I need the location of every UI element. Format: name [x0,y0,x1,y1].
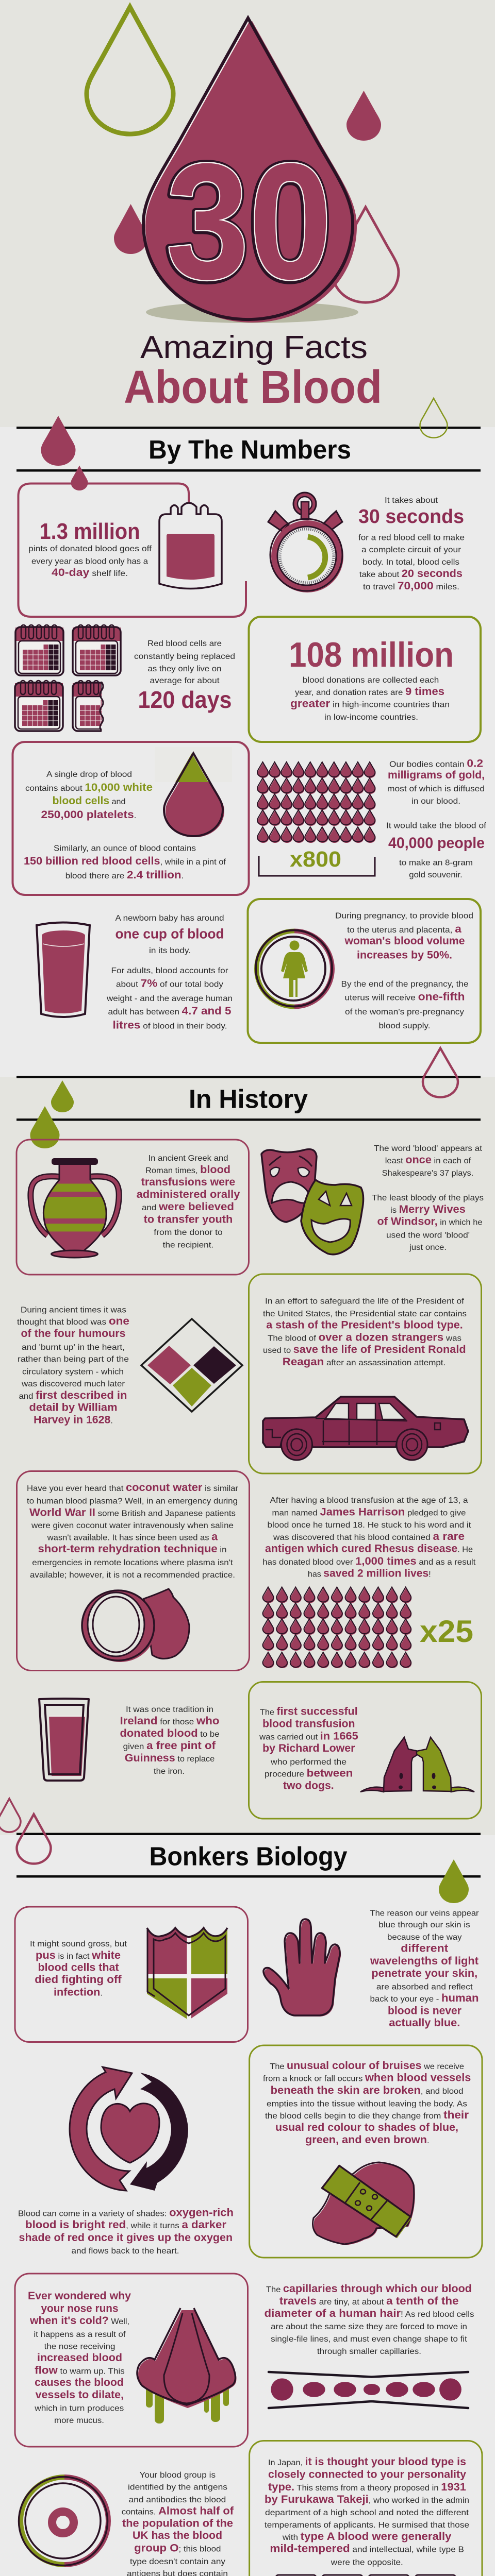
text block: Your blood group is [140,2471,216,2480]
text block: of Windsor, in which he [377,1216,483,1228]
text block: administered orally [137,1189,240,1200]
text block: because of the way [387,1933,462,1942]
text block: 250,000 platelets . [41,809,136,821]
text block: has saved 2 million lives! [308,1568,431,1580]
text block: average for about [150,676,220,685]
text block: to the uterus and placenta, a [347,923,461,935]
panel: bruises [250,2045,482,2258]
text block: blue through our skin is [378,1921,470,1929]
icon: car [263,1397,468,1460]
panel frame [249,1682,482,1819]
big number 30: 30 [166,129,332,313]
section heading: In History [16,1048,481,1148]
text block: For adults, blood accounts for [111,967,228,975]
text block: was discovered that his blood contained a rare [273,1531,465,1543]
fact: shades of blood [18,2067,234,2256]
text block: milligrams of gold, [388,769,485,781]
text block: flow to warm up. This [35,2364,125,2376]
icon: O in ring [19,2477,108,2566]
chart: capillary with cells [269,2372,468,2408]
drop shadow ellipse [146,301,358,323]
text block: type. This stems from a theory proposed in 1931 [268,2481,466,2493]
text block: about 7% of our total body [116,978,223,989]
icon: maroon outline drop [16,1814,51,1863]
title: About Blood [124,362,382,413]
text block: Similarly, an ounce of blood contains [54,844,196,853]
text block: take about 20 seconds [359,568,463,580]
icon: theatre masks [261,1149,364,1255]
text block: uterus will receive one-fifth [344,991,465,1003]
text block [17,1306,129,1426]
fact: capillaries [264,2283,474,2408]
panel frame [15,2274,248,2447]
text block: least once in each of [385,1154,471,1166]
text block: 1.3 million [39,519,140,544]
text block: After having a blood transfusion at the age of 13, a [270,1496,468,1505]
text block: a stash of the President's blood type. [266,1319,463,1331]
panel: ancient Greek and Roman [16,1140,249,1275]
text block: actually blue. [389,2017,460,2029]
text block: diameter of a human hair ! As red blood cells [264,2308,474,2319]
text block: Red blood cells are [147,639,222,648]
text block: wasn't available. It has since been used as a [47,1531,218,1543]
icon: green outline drop [420,398,448,438]
text block: the population of the [122,2517,233,2530]
text block: back to your eye - human [370,1992,478,2004]
text block: The reason our veins appear [370,1909,479,1918]
panel frame [15,1907,248,2042]
text block: are absorbed and reflect [376,1982,473,1991]
text block: gold souvenir. [409,871,463,879]
text block: greater in high-income countries than [290,698,450,710]
icon: two-colour drop [163,751,224,837]
text block: given a free pint of [123,1740,216,1752]
text block: A single drop of blood [46,770,132,779]
fact: blood in Shakespeare [261,1144,484,1255]
text block: 30 seconds [358,506,464,528]
text block: and antibodies the blood [129,2496,226,2504]
text block: year, and donation rates are 9 times [295,686,444,698]
text block: used the word 'blood' [386,1231,470,1240]
panel frame [248,899,481,1043]
text block: of the woman's pre-pregnancy [345,1008,464,1016]
panel frame [249,617,481,742]
text block: identified by the antigens [128,2483,227,2492]
multiplier x800 with bracket [259,847,375,876]
text block: In Japan, it is thought your blood type is [268,2456,466,2468]
panel: presidential car [249,1274,482,1473]
text block: blood cells and [53,795,126,807]
text block: It takes about [385,496,438,505]
text block: World War II some British and Japanese patients [29,1506,236,1518]
text block: pints of donated blood goes off [28,545,152,553]
text block: blood supply. [378,1022,430,1030]
text block: has donated blood over 1,000 times and as a result [262,1555,476,1567]
text block: man named James Harrison pledged to give [272,1506,466,1518]
text block: procedure between [265,1768,353,1780]
text block: pus is in fact white [36,1950,121,1961]
text block: Roman times, blood [145,1164,230,1176]
icon: maroon drop [41,416,75,466]
icon: calendars [15,625,121,731]
text block: UK has the blood [133,2530,222,2541]
text block: thought that blood was one [17,1315,129,1327]
text block: antigen which cured Rhesus disease . He [265,1543,473,1555]
text block: The capillaries through which our blood [266,2283,472,2295]
text block: Reagan after an assassination attempt. [283,1356,446,1368]
icon: glass of blood [37,922,90,1017]
text block: travels are tiny, at about a tenth of the [279,2295,459,2307]
icon: small maroon drop right [346,91,381,141]
text block [28,519,152,579]
text block: with type A blood were generally [282,2531,452,2543]
text block: In ancient Greek and [148,1154,228,1163]
text block: blood there are 2.4 trillion . [65,869,184,881]
panel: white cells and platelets [12,742,249,895]
text block: and flows back to the heart. [71,2247,179,2256]
panel frame [16,1140,249,1275]
text block: through smaller capillaries. [317,2347,421,2356]
text block: the blood cells begin to die they change from their [265,2109,469,2121]
icon: two dogs [360,1737,474,1792]
text block [335,912,473,1030]
text block: increased blood [37,2352,122,2364]
text block: usual red colour to shades of blue, [275,2122,458,2133]
text block: was carried out in 1665 [259,1731,358,1742]
text block: 108 million [289,635,454,674]
text block: were given coconut water intravenously when saline [31,1521,234,1530]
text block: and 'burnt up' in the heart, [22,1343,125,1352]
fact: cup of blood [37,914,233,1031]
text block [27,1482,239,1580]
fact: pint of Guinness [39,1699,220,1781]
heading text: In History [189,1084,308,1113]
icon: drop on tube [71,466,88,490]
text block: to transfer youth [144,1214,233,1225]
icon: circulation arrows and heart [70,2067,188,2191]
text block: Harvey in 1628. [34,1414,113,1426]
text block [106,914,233,1031]
text block: vessels to dilate, [36,2389,124,2401]
text block: The blood of over a dozen strangers was [268,1332,461,1344]
section heading: By The Numbers [16,398,481,472]
text block: In an effort to safeguard the life of the President of [265,1297,465,1306]
text block: is Merry Wives [390,1204,466,1215]
text block: temperaments of applicants. He surmised that those [265,2521,469,2530]
text block: died fighting off [35,1974,122,1986]
icon: green drop [439,1859,469,1903]
heading text: By The Numbers [148,435,351,464]
panel frame [250,2045,482,2258]
text block: penetrate your skin, [371,1968,477,1979]
text block: Blood can come in a variety of shades: oxygen-rich [18,2207,234,2218]
text block: and were believed [142,1201,234,1213]
text block: from the donor to [154,1228,223,1237]
text block: causes the blood [35,2377,124,2388]
text block: in our blood. [411,797,460,806]
text block: The unusual colour of bruises we receive [270,2060,464,2072]
text block: in low-income countries. [324,713,418,722]
text block: the iron. [154,1767,185,1776]
fact: veins appear blue [263,1909,479,2029]
text block: Ireland for those who [120,1715,220,1727]
title: Amazing Facts [140,330,368,365]
fact: four humours [17,1306,242,1426]
text block: beneath the skin are broken , and blood [271,2084,464,2096]
panel frame [12,742,249,895]
text block [262,1496,476,1580]
text block [265,2456,469,2567]
text block: During ancient times it was [21,1306,126,1315]
text block: Ever wondered why [28,2290,131,2302]
text block: infection. [54,1987,103,1998]
text block: The least bloody of the plays [372,1194,484,1202]
text block [137,1154,240,1250]
text block [370,1909,479,2029]
fact: 120 days [15,625,235,731]
panel: pregnancy [248,899,481,1043]
text block: donated blood to be [120,1727,220,1739]
text block: By the end of the pregnancy, the [341,980,469,989]
text block: adult has between 4.7 and 5 [108,1005,232,1017]
title [124,330,382,413]
text block: type doesn't contain any [130,2557,225,2566]
icon: stopwatch [268,493,343,592]
icon: large blood drop [143,18,357,323]
text block: transfusions were [141,1176,235,1188]
text block: different [401,1942,448,1954]
text block: as they only live on [147,665,222,673]
text block: single-file lines, and must even change shape to fit [271,2335,467,2344]
text block [30,1940,127,1998]
icon: grid of drops [263,1587,411,1668]
text block: to human blood plasma? Well, in an emergency during [27,1497,238,1506]
text block: which in turn produces [34,2404,124,2413]
icon: maroon outline drop [423,1048,458,1097]
text block: During pregnancy, to provide blood [335,912,473,921]
section heading: Bonkers Biology [0,1799,481,1903]
text block [24,770,226,881]
fact: gold in blood [257,758,487,879]
text block: the nose receiving [44,2342,115,2351]
text block: empties into the tissue without leaving the body. As [267,2100,467,2109]
text block: weight - and the average human [106,994,233,1003]
icon: vase [30,1158,119,1258]
text block: mild-tempered and intellectual, while type B [270,2543,464,2554]
text block: It was once tradition in [126,1705,213,1714]
text block [264,2283,474,2356]
text block: available; however, it is not a recommended practice. [30,1571,235,1580]
panel: coconut water [16,1471,250,1670]
text block: The word 'blood' appears at [374,1144,483,1153]
text block: increases by 50%. [357,949,452,961]
text block: two dogs. [283,1780,334,1791]
text block: blood cells that [38,1962,119,1974]
text block: by Furukawa Takeji , who worked in the admin [265,2494,469,2505]
text block: It might sound gross, but [30,1940,127,1948]
text block: 120 days [138,686,232,713]
text block: the United States, the Presidential state car contains [263,1310,467,1318]
multiplier x25: x25 [420,1614,473,1649]
text block: are about the same size they are forced to move in [271,2323,467,2331]
panel frame [250,2441,482,2576]
text block: A newborn baby has around [116,914,224,923]
text block: contains about 10,000 white [25,782,153,793]
panel: first transfusion dogs [249,1682,482,1819]
multiplier x800 with bracket: x800 [290,847,341,872]
icon: shield [144,1927,230,2022]
text block: blood transfusion [262,1718,355,1730]
text block: to travel 70,000 miles. [363,580,459,592]
text block: just once. [409,1243,447,1252]
text block: 150 billion red blood cells , while in a pint of [24,855,226,867]
text block: department of a high school and noted the different [265,2509,469,2517]
text block: body. In total, blood cells [362,558,459,567]
icon: grid of drops [257,762,375,843]
panel: 108 million [249,617,481,742]
text block [263,2060,471,2146]
text block: rather than being part of the [18,1355,129,1364]
icon: green drop [51,1080,74,1112]
text block: by Richard Lower [262,1742,355,1754]
text block: when it's cold? Well, [29,2315,129,2327]
icon: woman in ring [256,930,332,1007]
text block: group O ; this blood [134,2542,221,2554]
icon: four humours diamond [141,1319,242,1412]
panel frame [16,1471,250,1670]
fact: James Harrison [262,1496,476,1668]
text block: a complete circuit of your [361,546,461,554]
text block: most of which is diffused [387,785,485,793]
fact: 30 seconds stopwatch [268,493,465,592]
icon: small maroon drop left [114,204,147,254]
icon: green drop lower [30,1106,60,1148]
text block: to make an 8-gram [399,859,473,868]
text block [263,1297,467,1368]
icon: maroon outline drop [333,207,399,302]
text block: more mucus. [54,2416,104,2425]
icon: nose with drips [137,2308,236,2424]
text block: used to save the life of President Ronald [263,1344,466,1355]
text block: detail by William [29,1402,118,1414]
panel: shelf life blood bag [19,466,246,617]
heading text: Bonkers Biology [150,1841,348,1871]
text block [289,635,454,722]
text block: and first described in [19,1389,127,1401]
text block: in its body. [149,946,191,955]
icon: four labelled vials [276,2575,458,2576]
text block: Guinness to replace [125,1752,214,1764]
text block: were the opposite. [331,2558,403,2567]
text block: Our bodies contain 0.2 [389,758,483,770]
text block: every year as blood only has a [31,557,148,566]
text block: short-term rehydration technique in [38,1543,227,1555]
text block: 40-day shelf life. [52,567,128,579]
text block: constantly being replaced [134,652,235,661]
text block: your nose runs [41,2302,119,2314]
hero: drops and number 30 [87,7,399,323]
text block [372,1144,484,1252]
fact: blood group O [19,2471,234,2576]
text block: it happens as a result of [34,2330,126,2339]
text block: who performed the [270,1758,346,1767]
panel: runny nose [15,2274,248,2447]
text block: contains. Almost half of [122,2505,234,2517]
panel: Japan blood type personality [250,2441,482,2576]
text block [122,2471,234,2576]
text block [386,758,487,879]
text block [18,2207,234,2256]
tube frame [19,483,246,617]
text block: closely connected to your personality [268,2469,466,2480]
icon: coconut [82,1589,189,1662]
text block [134,639,235,713]
text block: one cup of blood [116,926,224,942]
text block: Have you ever heard that coconut water is similar [27,1482,239,1494]
text block: of the four humours [21,1328,126,1340]
text block: woman's blood volume [344,935,465,947]
text block: litres of blood in their body. [112,1020,227,1031]
text block: The first successful [260,1706,358,1718]
text block: emergencies in remote locations where plasma isn't [32,1558,233,1567]
text block: blood donations are collected each [303,676,439,685]
text block: was discovered much later [21,1380,125,1388]
text block: blood is never [388,2005,461,2016]
text block [259,1706,358,1791]
icon: green outline drop [87,7,173,134]
text block: 40,000 people [388,835,485,852]
icon: blood bag [159,503,222,588]
icon: hand [263,1919,341,2016]
text block: green, and even brown . [305,2134,430,2146]
text block: from a knock or fall occurs when blood vessels [263,2072,471,2084]
text block: shade of red once it gives up the oxygen [19,2232,233,2244]
text block: for a red blood cell to make [358,534,465,542]
text block: blood once he turned 18. He stuck to his word and it [267,1521,471,1530]
text block [358,496,465,592]
text block [120,1705,220,1776]
text block [28,2290,131,2425]
panel: pus shield [15,1907,248,2042]
text block: blood is bright red , while it turns a darker [25,2219,226,2231]
icon: bruise and plaster [313,2162,415,2245]
text block: Shakespeare's 37 plays. [382,1169,473,1178]
text block: the recipient. [163,1241,213,1250]
text block: It would take the blood of [386,822,487,831]
icon: pint glass [39,1699,89,1781]
text block: wavelengths of light [370,1955,478,1967]
text block: circulatory system - which [22,1368,124,1377]
icon: maroon outline drop small [0,1799,21,1832]
big number 30: 30 [166,129,332,314]
panel frame [249,1274,482,1473]
